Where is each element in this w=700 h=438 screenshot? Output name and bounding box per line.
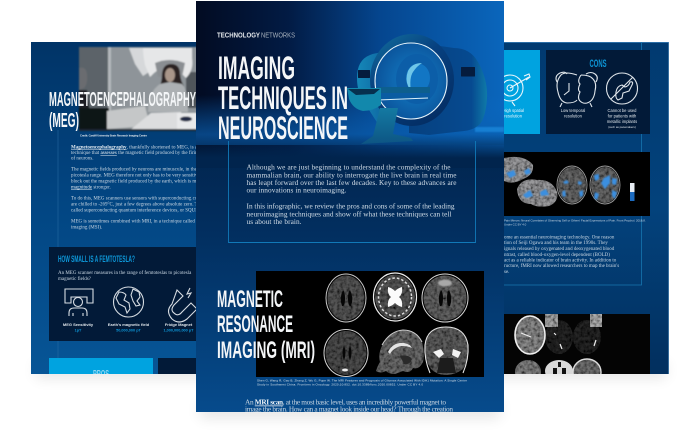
text block: MEG description: called superconducting quantum interference devices, or SQUIDs. <box>71 208 204 214</box>
photo: MEG scanner patient <box>79 47 197 131</box>
title: NEUROSCIENCE <box>218 110 348 146</box>
intro text <box>246 162 456 226</box>
text block: fMRI: ignals released by oxygenated and deoxygenated blood <box>504 247 615 252</box>
text block: MEG description: imaging (MSI). <box>71 226 102 230</box>
heading: MRI: MAGNETIC <box>217 286 283 313</box>
text block: MEG description: block out the magnetic field produced by the earth, which is many <box>71 180 204 184</box>
panel: right page fMRI <box>497 42 669 385</box>
text block: fMRI: ntrast, called blood-oxygen-level dependent (BOLD) <box>504 253 610 258</box>
heading: MRI <box>217 286 315 364</box>
intro text: Although we are just beginning to understand the complexity of the <box>246 162 450 172</box>
text block: MEG description: Magnetoencephalography, thankfully shortened to MEG, is a <box>71 146 198 150</box>
intro text: has leapt forward over the last few decades. Key to these advances are <box>246 178 456 187</box>
logo: NETWORKS <box>261 32 295 40</box>
photo credit: Credit: Cardiff University Brain Research Imaging Centre <box>80 134 148 138</box>
caption: Pain Mirrors: Neural Correlates of Observing Self or Others' Facial Expressions of Pain. Front Psychol. 2018;8. <box>504 218 646 222</box>
text block: MEG description: of neurons. <box>71 156 94 162</box>
title: TECHNIQUES IN <box>218 80 348 116</box>
logo: TECHNOLOGY <box>217 32 260 40</box>
figure: CT scans <box>504 314 650 374</box>
text block: MEG description: To do this, MEG scanners use sensors with superconducting coils that <box>71 196 211 202</box>
cons labels: for patients with <box>608 114 637 118</box>
panel: cons <box>546 50 650 134</box>
intro text: neuroimaging techniques and show off what these techniques can tell <box>246 209 452 218</box>
panel: left page MEG <box>31 42 196 374</box>
panel text: magnetic fields? <box>58 277 92 282</box>
cons labels: metallic implants <box>607 119 637 124</box>
title: IMAGING <box>218 50 295 86</box>
intro text: mammalian brain, our ability to interrogate the live brain in real time <box>246 170 456 179</box>
cons heading: CONS <box>590 58 606 70</box>
text block: fMRI: act as a reliable indicator of brain activity. In addition to <box>504 258 617 264</box>
hero banner <box>196 1 504 168</box>
panel: how small is a femtotesla <box>49 247 199 341</box>
text block: MEG description: The magnetic fields produced by neurons are minuscule, in the <box>71 168 198 172</box>
heading: MRI: IMAGING (MRI) <box>217 337 315 364</box>
text block: MRI description <box>245 398 453 414</box>
icon: fridge magnet <box>168 288 197 322</box>
icon labels: MEG Sensitivity <box>63 322 94 327</box>
caption: Study in Southwest China. Frontiers in Oncology. 2020;10:852. doi:10.3389/fonc.2020.00852. Under CC BY 4.0 <box>257 382 423 386</box>
figure: MRI scans <box>256 271 484 377</box>
heading: MEG <box>50 92 196 131</box>
text block: fMRI: ructure, fMRI now allowed researchers to map the brain's <box>504 264 619 269</box>
icon labels <box>63 324 192 327</box>
icon labels: Fridge Magnet <box>165 322 193 327</box>
scan A <box>326 274 366 322</box>
heading: MRI: RESONANCE <box>217 311 293 338</box>
page shadows <box>36 362 666 418</box>
intro box <box>228 141 476 242</box>
text block: fMRI <box>504 236 619 275</box>
panel: centre page <box>196 1 504 414</box>
cons labels: resolution <box>564 114 583 118</box>
text block: fMRI: se. <box>504 270 509 275</box>
pros labels <box>504 108 524 118</box>
text block: fMRI: tion of Seiji Ogawa and his team in the 1990s. They <box>504 241 608 246</box>
icon values: 1pT <box>75 328 82 332</box>
text block: MEG description: technique that assesses the magnetic field produced by the firing <box>71 151 200 156</box>
illustration: MRI scanner <box>347 34 487 144</box>
text block: MEG description <box>71 144 196 230</box>
caption <box>257 378 467 386</box>
panel: cons <box>158 358 198 374</box>
intro text: our innovations in neuroimaging. <box>246 186 347 195</box>
pros labels: resolution <box>504 114 523 118</box>
text block: MRI description: image the brain. How can a magnet look inside our head? Through the creation <box>245 404 453 414</box>
scan E <box>376 330 424 374</box>
icon: no implants <box>606 73 638 104</box>
text block: MEG description: are chilled to -269°C, just a few degrees above absolute zero. These are <box>71 202 215 208</box>
cons labels: Low temporal <box>561 108 585 113</box>
text block: MEG description: magnitude stronger. <box>71 186 111 190</box>
icon values: 50,000,000 pT <box>116 328 142 332</box>
icon: MEG sensitivity <box>65 289 93 316</box>
panel: pros <box>49 358 153 374</box>
text block: MRI description: An MRI scan, at the most basic level, uses an incredibly powerful magnet to <box>245 398 446 406</box>
panel: left page MEG: MAGNETOENCEPHALOGRAPHY <box>49 88 196 111</box>
scan B <box>374 273 416 321</box>
icon: earth <box>114 287 144 317</box>
panel: pros <box>504 50 540 134</box>
panel: pros: PROS <box>93 368 109 380</box>
intro text: us about the brain. <box>246 217 302 226</box>
logo <box>217 32 295 38</box>
text block: fMRI: ome an essential neuroimaging technology. One reason <box>504 236 615 240</box>
outlined text box <box>504 42 642 285</box>
text block: MEG description: picotesla range. MEG therefore not only has to be very sensitive, but <box>71 174 209 178</box>
caption: Under CC BY 4.0 <box>504 222 527 226</box>
panel text: An MEG scanner measures in the range of femtoteslas to picotesla <box>58 271 192 276</box>
icon values <box>74 329 194 332</box>
icon: alarm clock <box>556 72 597 107</box>
icon labels: Earth's magnetic field <box>108 322 150 327</box>
scan F <box>425 327 468 375</box>
caption: Shen G, Wang R, Gao B, Zhang Z, Wu G, Pope W. The MRI Features and Prognosis of Gliomas Associated With IDH1 Mutation: A Single Center <box>257 378 467 382</box>
text block: MEG description: MEG is sometimes combined with MRI, in a technique called magnetic <box>71 220 215 224</box>
title <box>218 56 348 140</box>
icon: target <box>504 73 531 106</box>
scan C <box>422 274 468 322</box>
scan D <box>324 330 368 376</box>
intro text: In this infographic, we review the pros and cons of some of the leading <box>246 202 455 210</box>
cons labels: (such as pacemakers) <box>608 125 636 129</box>
heading: MEG: (MEG) <box>49 109 79 132</box>
figure: fMRI brains <box>504 152 650 216</box>
panel text <box>58 271 192 282</box>
cons labels <box>561 108 637 129</box>
panel heading: HOW SMALL IS A FEMTOTESLA? <box>58 254 135 265</box>
pros labels: High spatial <box>503 108 524 113</box>
icon values: 1,000,000,000 pT <box>164 328 194 332</box>
cons labels: Cannot be used <box>608 108 637 113</box>
caption <box>504 220 646 226</box>
